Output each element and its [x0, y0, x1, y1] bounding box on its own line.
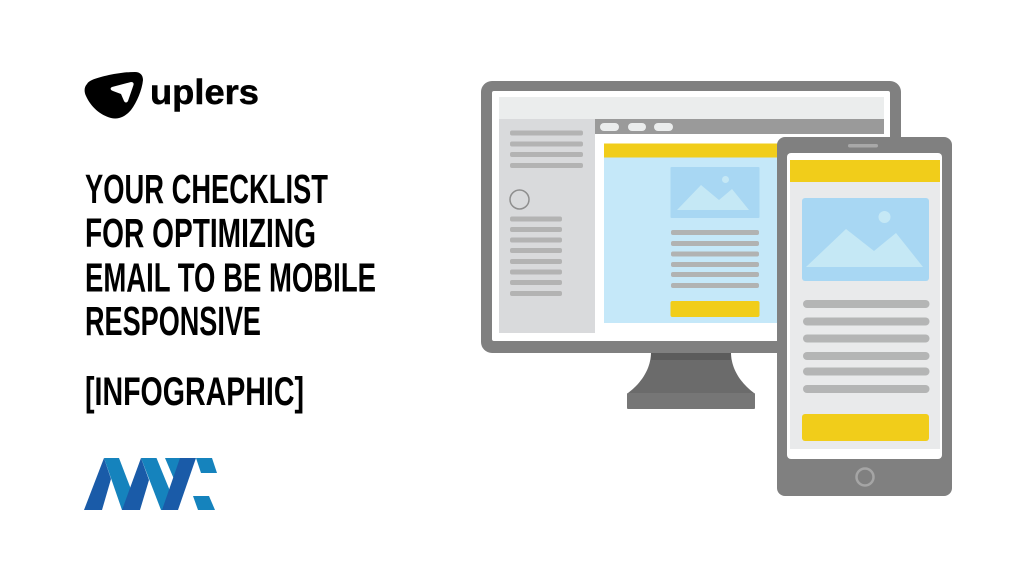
browser toolbar — [595, 119, 884, 134]
button — [670, 301, 760, 317]
phone header bar — [790, 160, 940, 182]
avatar circle — [510, 190, 529, 209]
browser top strip — [499, 97, 884, 119]
monitor stand — [627, 352, 755, 409]
image placeholder — [670, 167, 760, 218]
logo: uplers — [85, 72, 259, 119]
title: YOUR CHECKLIST — [85, 166, 328, 212]
monitor frame — [481, 81, 901, 353]
text lines — [671, 230, 759, 288]
title: EMAIL TO BE MOBILE — [85, 254, 376, 300]
email panel — [604, 144, 779, 323]
logo: MTC — [84, 458, 217, 510]
title: RESPONSIVE — [85, 298, 261, 344]
phone text lines — [803, 300, 930, 393]
title: FOR OPTIMIZING — [85, 210, 316, 256]
title — [85, 166, 376, 344]
monitor screen — [492, 91, 890, 341]
home button — [856, 468, 874, 486]
phone image placeholder — [802, 198, 929, 281]
sidebar — [499, 119, 595, 333]
phone screen — [787, 153, 942, 459]
monitor illustration — [481, 81, 901, 409]
phone button — [802, 414, 929, 441]
wordmark: uplers: uplers — [150, 73, 259, 112]
icon: uplers arrow blob — [85, 72, 143, 119]
speaker — [848, 144, 878, 148]
subtitle: infographic tag: [INFOGRAPHIC] — [85, 370, 304, 414]
phone illustration — [777, 137, 952, 496]
phone body — [777, 137, 952, 496]
